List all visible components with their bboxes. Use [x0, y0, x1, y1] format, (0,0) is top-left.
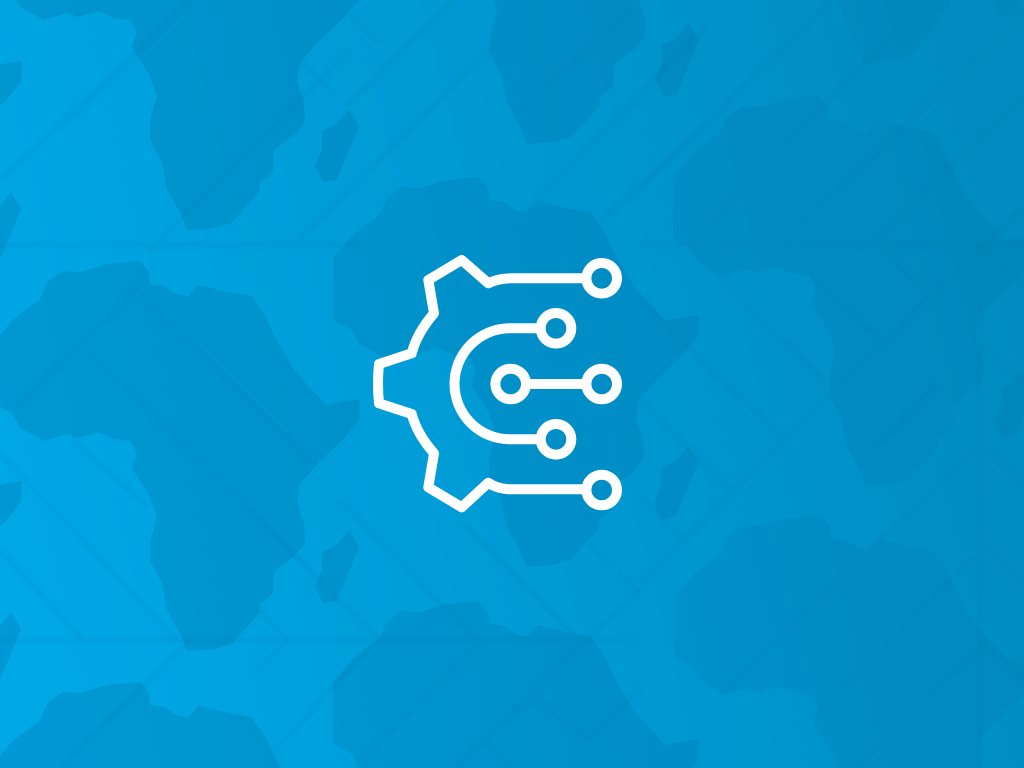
- background: Africa map silhouettes: [0, 0, 699, 768]
- background: faint diagonal lines: [78, 78, 982, 644]
- node: middle left: [495, 369, 526, 399]
- node: middle right: [586, 369, 617, 399]
- gear outline with top and bottom circuit traces: [378, 260, 583, 507]
- inner U-shaped trace: [454, 328, 537, 439]
- node: top right: [586, 263, 617, 294]
- node: lower inner: [541, 424, 571, 455]
- icon: gear with circuit nodes: [378, 260, 617, 507]
- node: bottom right: [586, 475, 617, 505]
- node: upper inner: [541, 313, 571, 344]
- middle connecting trace: [526, 379, 586, 389]
